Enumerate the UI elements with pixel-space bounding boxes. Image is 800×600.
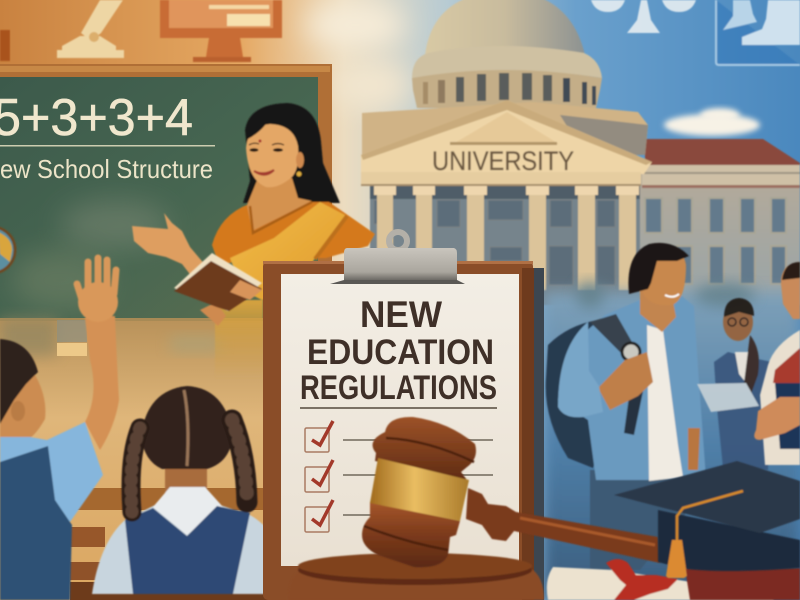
text: REGULATIONS: REGULATIONS bbox=[300, 369, 497, 407]
teacher's book bbox=[174, 253, 262, 311]
icon: scales of justice bbox=[591, 0, 696, 33]
clouds bbox=[305, 1, 760, 136]
vest bbox=[0, 446, 72, 600]
left braid bbox=[131, 428, 140, 512]
hair bbox=[243, 103, 340, 203]
right braid bbox=[232, 420, 247, 502]
brass band bbox=[370, 458, 469, 521]
handle bbox=[466, 488, 660, 563]
neck bbox=[165, 465, 207, 493]
sari drape bbox=[230, 202, 347, 300]
diploma scroll bbox=[547, 559, 774, 600]
trees bbox=[576, 281, 755, 309]
text: UNIVERSITY: UNIVERSITY bbox=[432, 146, 574, 176]
student: right girl with books bbox=[754, 262, 800, 465]
text: New School Structure: ew School Structure bbox=[0, 154, 213, 184]
red ribbon bbox=[606, 559, 678, 600]
raised arm and hand bbox=[77, 258, 119, 450]
head bbox=[0, 367, 45, 438]
vest bbox=[125, 506, 250, 594]
face bbox=[246, 124, 298, 187]
backpack bbox=[546, 320, 608, 468]
icon: book stack bbox=[0, 30, 10, 61]
clipboard bbox=[263, 232, 544, 600]
hair bbox=[141, 386, 233, 469]
icon: globe bbox=[0, 227, 15, 273]
main facade bbox=[361, 100, 652, 305]
shirt bbox=[0, 422, 103, 522]
student: centre girl with braids bbox=[92, 386, 293, 594]
neck bbox=[247, 178, 312, 231]
chalkboard bbox=[0, 64, 332, 322]
gavel bbox=[362, 417, 660, 567]
clipboard metal clip bbox=[330, 232, 465, 284]
right side lower blue background bbox=[543, 292, 800, 600]
collar bbox=[153, 487, 223, 535]
checkbox 1 bbox=[305, 421, 333, 452]
right wing bbox=[640, 139, 800, 305]
icon: computer monitor bbox=[160, 0, 282, 62]
blouse bbox=[212, 202, 375, 268]
t-shirt bbox=[647, 325, 683, 481]
tablet bbox=[697, 383, 759, 412]
tassel bbox=[666, 540, 687, 578]
head bbox=[634, 245, 686, 305]
checkbox 3 bbox=[305, 500, 333, 532]
graduation cap bbox=[614, 461, 800, 578]
books bbox=[685, 568, 800, 600]
text: EDUCATION: EDUCATION bbox=[307, 333, 494, 372]
gesturing arm and hand bbox=[132, 213, 206, 282]
tassel cord bbox=[677, 491, 743, 544]
jacket bbox=[558, 288, 706, 480]
checklist bbox=[305, 421, 493, 532]
neck bbox=[640, 285, 676, 332]
lower head bbox=[362, 502, 460, 567]
upper head bbox=[373, 417, 476, 480]
sound block base bbox=[288, 553, 544, 600]
text: NEW: NEW bbox=[360, 294, 442, 335]
checkbox 2 bbox=[305, 460, 333, 492]
student: boy with backpack bbox=[546, 243, 706, 570]
sari lower fade bbox=[215, 300, 263, 380]
dome bbox=[362, 0, 648, 155]
shirt bbox=[92, 505, 293, 594]
icon: people profile panel bbox=[716, 0, 800, 65]
classroom background bbox=[0, 318, 270, 600]
strap bbox=[590, 314, 640, 362]
student: background woman with tablet bbox=[697, 298, 772, 470]
lower arm bbox=[200, 302, 226, 326]
icon: microscope bbox=[57, 0, 124, 58]
university building bbox=[361, 0, 800, 305]
right arm bbox=[688, 428, 700, 470]
student: left girl raising hand bbox=[0, 258, 119, 600]
teacher bbox=[132, 103, 375, 380]
arm and hand bbox=[598, 352, 653, 410]
lower jacket shadow bbox=[590, 470, 695, 570]
